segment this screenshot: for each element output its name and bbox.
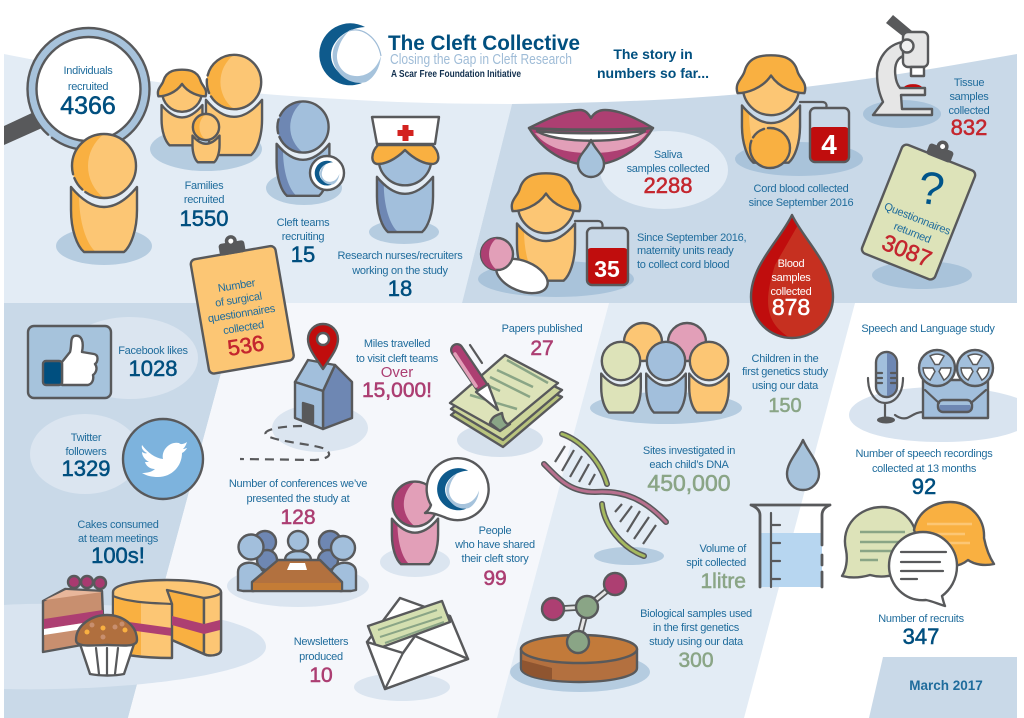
stat: saliva samples: 2288 [644,173,692,198]
stat: families recruited: 1550 [180,206,228,231]
stat: number of recruits [878,613,965,649]
muffin [76,615,137,676]
icon: cakes and muffin [43,576,221,676]
stat: children in genetics study: first genetics study [742,366,829,378]
stat: speech recordings: Number of speech recordings [855,448,993,460]
stat: miles travelled: Miles travelled [364,338,430,350]
icon: single doll [56,134,152,265]
stat: biological samples: Biological samples used [640,608,752,620]
stat: people sharing their story: who have shared [454,539,535,551]
stat: newsletters: Newsletters [294,636,349,648]
stat: tissue samples: Tissue [954,77,984,89]
stat: newsletters [294,636,349,687]
mother [158,70,206,145]
icon: facebook thumb [28,326,111,398]
stat: blood samples: Blood [778,258,805,270]
logo byline: A Scar Free Foundation Initiative [391,69,521,80]
facebook ellipse [62,317,198,399]
icon: speech bubbles [842,502,994,606]
stat: number of recruits: 347 [903,624,939,649]
stat: volume of spit: Volume of [700,543,747,555]
stat: blood samples: 878 [772,294,810,320]
stat: biological samples: study using our data [649,636,744,648]
small logo [437,468,479,510]
icon: group of genetics dolls [590,323,742,424]
panel: questionnaires clipboard [860,136,977,289]
microphone [868,352,923,424]
stat: cakes consumed: at team meetings [78,533,159,545]
twitter ellipse [30,414,140,494]
heading: the story in numbers: numbers so far... [597,65,709,81]
big cake [113,580,221,658]
panel: questionnaires clipboard: ? [915,161,948,216]
stat: cleft teams recruiting: 15 [291,242,315,267]
stat: biological samples: 300 [678,649,714,672]
heading: the story in numbers: The story in [613,46,693,62]
stat: newsletters: 10 [309,664,333,687]
stat: conferences: presented the study at [247,493,350,505]
stat: tissue samples: samples [949,91,989,103]
stat: twitter followers: followers [66,446,107,458]
stat: research nurses: 18 [388,276,412,301]
stat: people sharing their story: People [479,525,511,537]
stat: sites investigated: 450,000 [647,470,731,496]
stat: twitter followers [62,432,110,481]
stat: cord blood [749,183,853,209]
stat: saliva samples: Saliva [654,149,683,161]
stat: speech recordings: 92 [912,474,936,499]
stat: miles travelled: Over [381,364,413,381]
stat: miles travelled [356,338,439,402]
stat: number of recruits: Number of recruits [878,613,965,625]
panel: questionnaires clipboard: 3087 [878,229,936,272]
stat: cord blood: Cord blood collected [754,183,849,195]
stat: papers published: 27 [530,337,554,360]
logo mark [319,23,381,85]
stat: cakes consumed: Cakes consumed [77,519,159,531]
father [206,55,262,155]
icon: person with speech bubble [380,458,489,577]
stat: twitter followers: Twitter [71,432,102,444]
heading: speech and language study: Speech and Language study [861,323,995,335]
blood bag [587,228,628,285]
stat: biological samples [640,608,752,672]
stat: people sharing their story: 99 [483,567,507,590]
icon: beaker [751,505,830,587]
panel: surgical questionnaires clipboard: of surgical [214,290,263,310]
stat: facebook likes [118,345,189,381]
stat: cleft teams recruiting: Cleft teams [277,217,330,229]
panel: surgical questionnaires clipboard: Number [217,277,257,295]
panel: questionnaires clipboard: returned [892,220,932,246]
stat: volume of spit: 1litre [700,570,746,593]
logo badge [310,156,344,190]
stat: tissue samples [948,77,990,140]
icon: mother, baby and cord blood bag [735,55,863,176]
icon: DNA helix [544,434,666,565]
stat: children in genetics study: 150 [768,395,802,417]
stat: blood samples: samples [771,272,811,284]
stat: papers published [502,323,582,360]
icon: spit drop [787,440,819,490]
icon: blood drop [751,215,833,338]
stat: research nurses: working on the study [351,265,449,277]
icon: magnifying glass [4,28,150,150]
icon: nurse doll [369,117,439,244]
text: maternity units: maternity units ready [637,245,734,257]
child [192,114,220,162]
stat: cleft teams recruiting: recruiting [282,231,324,243]
stat: research nurses: Research nurses/recruiters [337,250,463,262]
baby [481,238,553,300]
stat: twitter followers: 1329 [62,456,110,481]
panel: surgical questionnaires clipboard: collected [222,319,265,337]
stat: cakes consumed [77,519,159,568]
pen [455,345,498,410]
heading: the story in numbers [597,46,709,81]
icon: lips with saliva drop [529,110,653,177]
clip [926,136,957,163]
stat: conferences: Number of conferences we’ve [229,478,367,490]
stat: people sharing their story: their cleft story [462,553,529,565]
stat: conferences [229,478,367,529]
map pin [308,324,338,369]
blood bag: 35 [594,256,620,282]
stat: biological samples: in the first genetics [653,622,740,634]
icon: mother and baby with cord blood bag [478,173,634,300]
stat: blood samples: collected [770,286,812,298]
stat: speech recordings: collected at 13 months [872,463,977,475]
stat: volume of spit: spit collected [686,557,746,569]
stat: sites investigated: Sites investigated in [643,445,735,457]
text: maternity units [637,232,747,271]
icon: family of dolls [150,55,262,171]
stat: papers published: Papers published [502,323,582,335]
reel recorder [919,350,993,418]
stat: families recruited: Families [185,180,224,192]
text: maternity units: to collect cord blood [637,259,729,271]
stat: saliva samples: samples collected [627,163,710,175]
stat: children in genetics study: Children in the [752,353,819,365]
saliva ellipse [600,131,728,209]
panel: questionnaires clipboard: Questionnaires [882,201,953,238]
stat: children in genetics study [742,353,829,417]
stat: tissue samples: collected [948,105,990,117]
clip [217,233,246,256]
stat: individuals recruited: Individuals [63,65,113,77]
stat: individuals recruited [60,65,116,120]
stat: miles travelled: 15,000! [362,379,432,402]
icon: petri dish with molecule [510,573,650,692]
stat: newsletters: produced [299,651,343,663]
date label: March 2017 [909,678,983,693]
stat: blood samples [770,258,812,320]
logo strapline: Closing the Gap in Cleft Research [390,51,572,68]
stat: volume of spit [686,543,747,593]
panel: surgical questionnaires clipboard: questionnaires [207,303,277,325]
cake slice [43,576,106,652]
text: maternity units: Since September 2016, [637,232,747,244]
stat: conferences: 128 [280,506,316,529]
panel: surgical questionnaires clipboard [190,233,294,374]
stat: miles travelled: to visit cleft teams [356,353,439,365]
stat: individuals recruited: 4366 [60,92,116,120]
panel: surgical questionnaires clipboard: 536 [226,330,266,361]
blood bag: 4 [821,129,837,160]
stat: research nurses [337,250,463,301]
stat: families recruited [180,180,228,231]
icon: meeting around a table [227,531,369,607]
icon: cleft team doll [266,101,344,205]
paper corner fold [490,413,510,431]
speech bubble [425,458,489,520]
logo: The Cleft Collective [319,23,580,85]
icon: microscope [863,15,941,128]
icon: microphone and reel recorder [868,350,993,424]
stat: cakes consumed: 100s! [91,543,145,568]
stat: cleft teams recruiting [277,217,330,267]
stat: facebook likes: 1028 [129,356,177,381]
stat: people sharing their story [454,525,535,590]
icon: house with map pin [240,324,368,460]
logo title: The Cleft Collective [388,32,580,55]
stat: sites investigated: each child’s DNA [649,459,730,471]
icon: open envelope [354,598,468,701]
icon: twitter bird [123,419,203,499]
stat: families recruited: recruited [184,194,224,206]
stat: facebook likes: Facebook likes [118,345,189,357]
stat: cord blood: since September 2016 [749,197,853,209]
stat: speech recordings [855,448,993,499]
stat: saliva samples [627,149,710,198]
stat: children in genetics study: using our data [752,380,819,392]
stat: individuals recruited: recruited [68,81,108,93]
stat: tissue samples: 832 [951,115,987,140]
baby head [750,128,790,168]
icon: stack of papers and pen [450,345,562,457]
stat: sites investigated [643,445,735,496]
